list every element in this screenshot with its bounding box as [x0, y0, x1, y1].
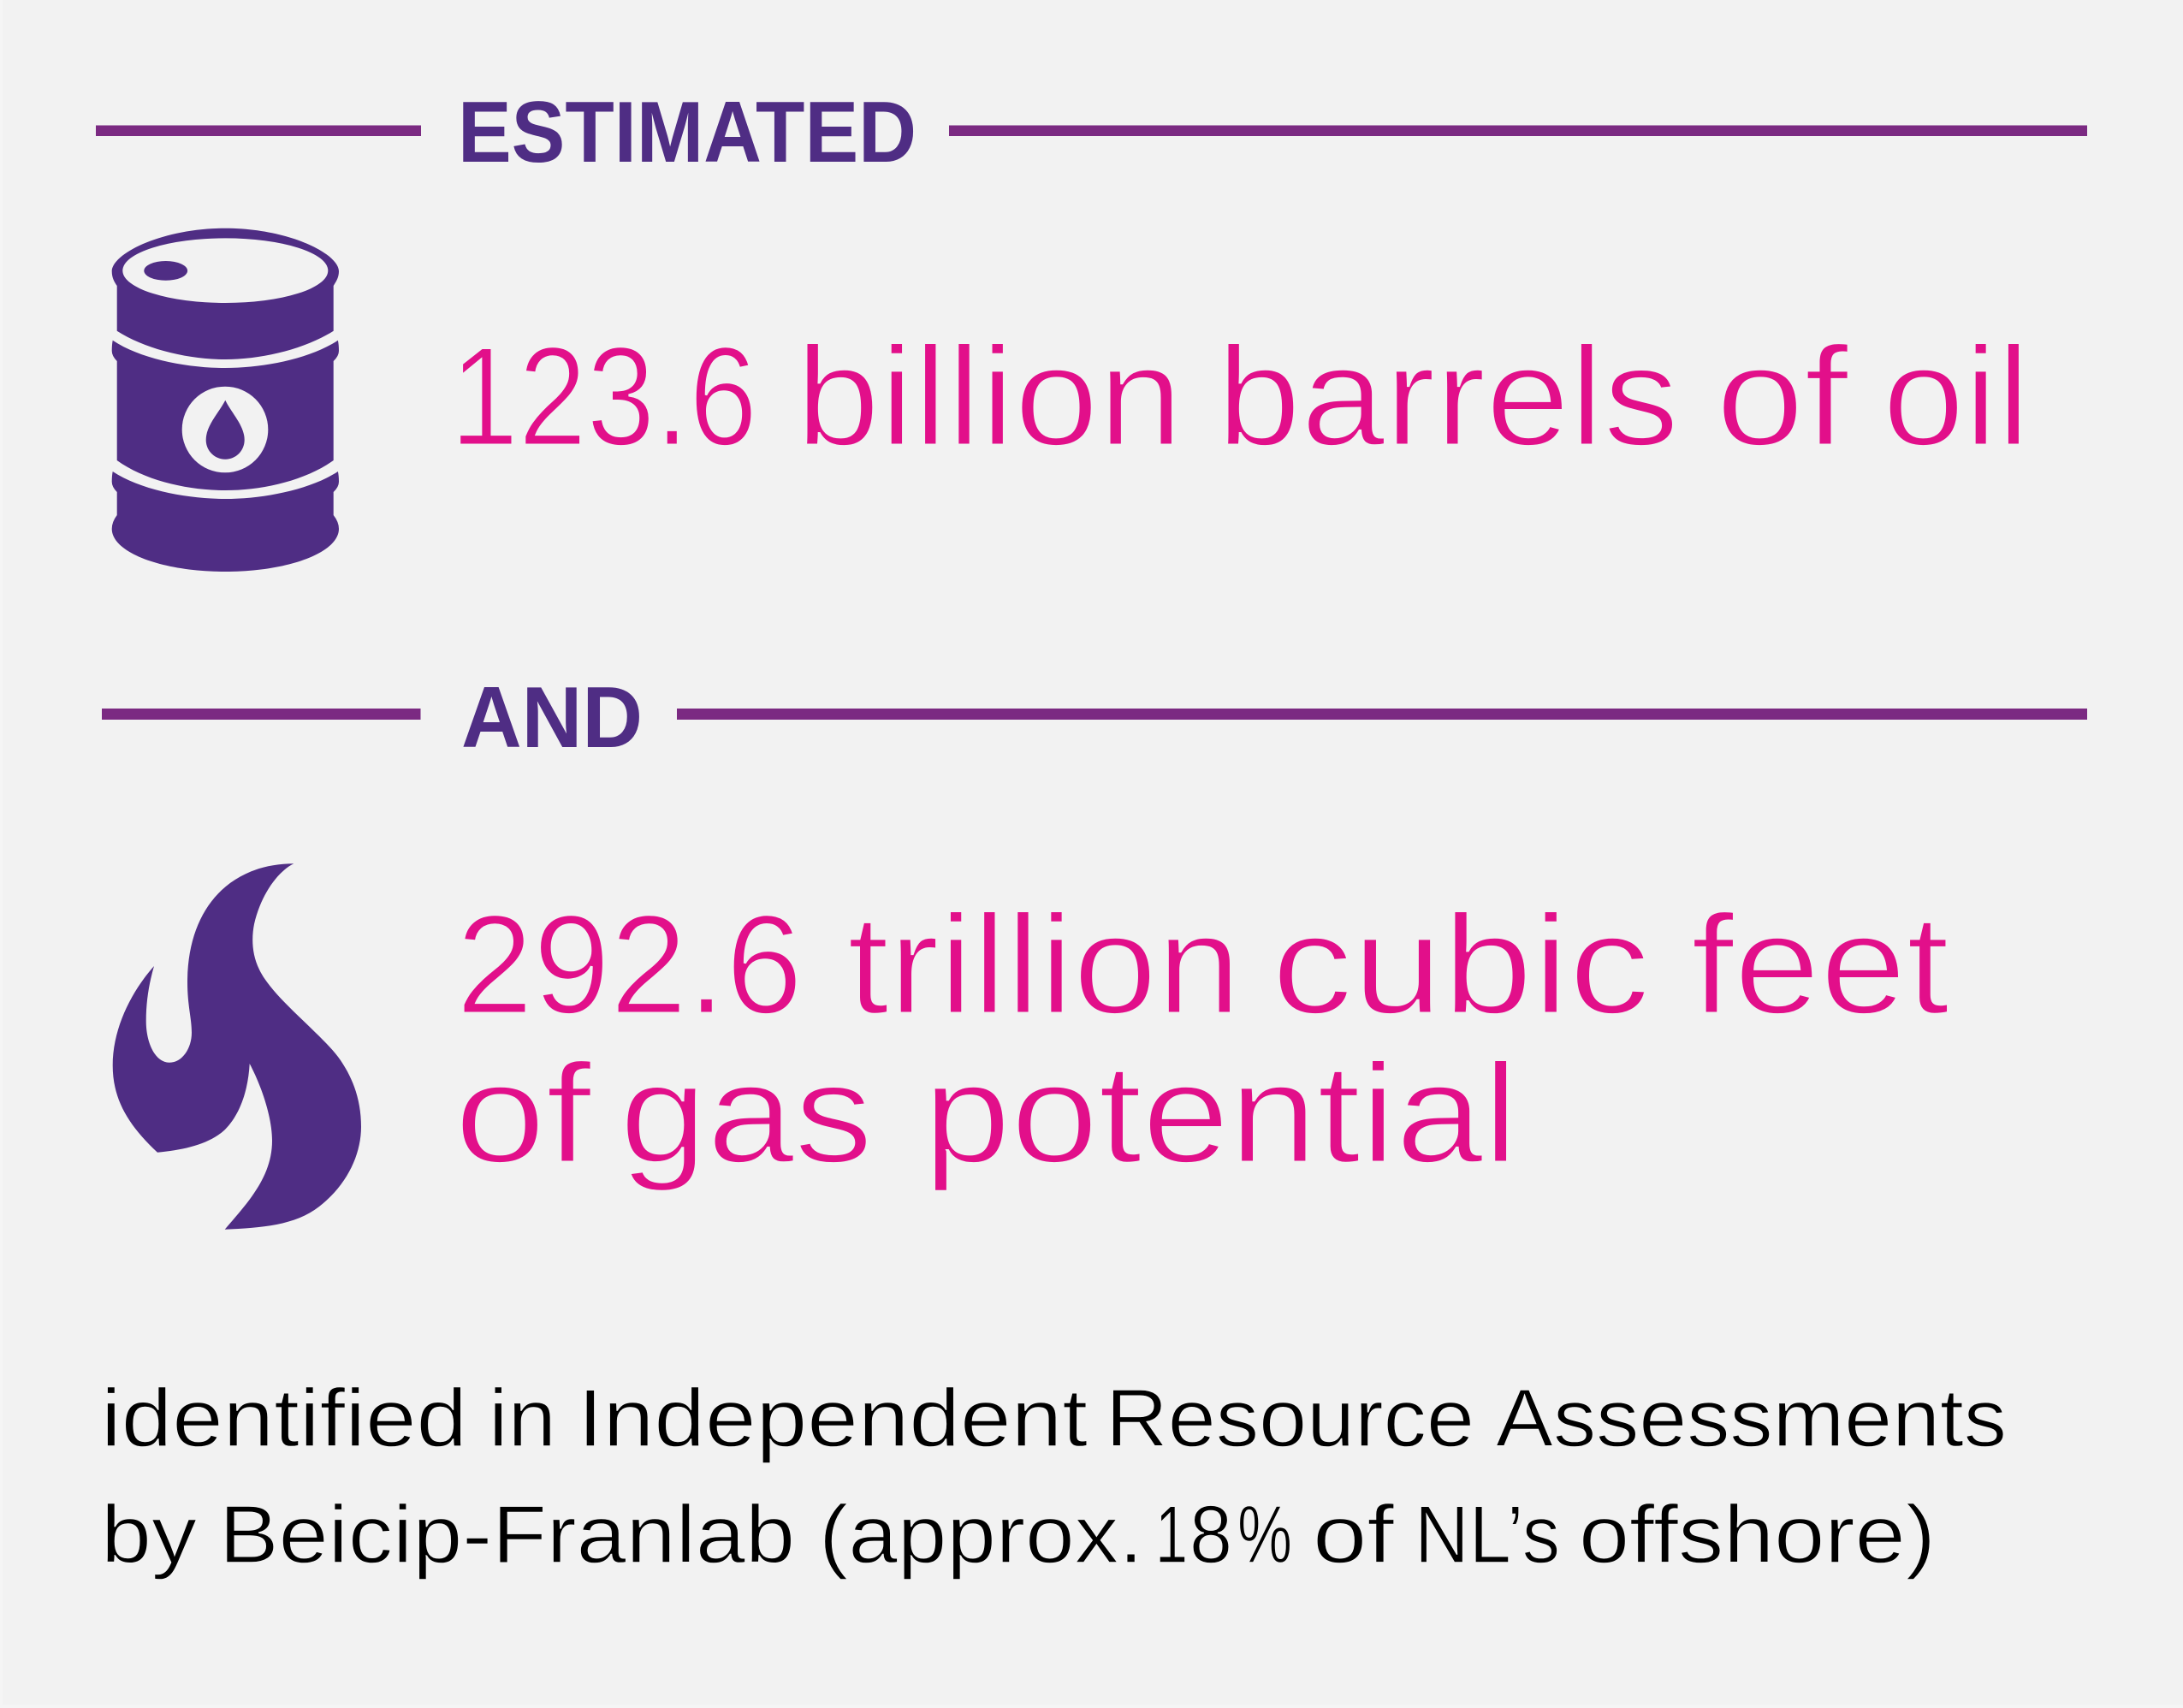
oil figure: oil [1883, 317, 2030, 475]
source note: % [1237, 1489, 1292, 1580]
source note: in [489, 1373, 556, 1464]
source note: by [101, 1489, 197, 1580]
source note: of [1313, 1489, 1394, 1580]
source note: NL’s [1415, 1489, 1560, 1580]
heading: and: AND [461, 670, 643, 766]
source note: Independent [578, 1373, 1088, 1464]
gas figure: of [454, 1035, 592, 1192]
oil figure: of [1716, 317, 1849, 475]
source note: 8 [1189, 1489, 1232, 1580]
oil figure: barrels [1217, 317, 1679, 475]
heading: estimated: ESTIMATED [458, 85, 917, 181]
gas figure: cubic [1272, 886, 1650, 1043]
source note: Resource [1106, 1373, 1474, 1464]
icon: gas flame [113, 863, 361, 1230]
source note: 1 [1155, 1489, 1188, 1580]
gas figure: 292.6 [456, 886, 803, 1043]
gas figure: feet [1691, 886, 1949, 1043]
oil figure: 123.6 [450, 317, 757, 475]
heading: and [102, 670, 2087, 766]
heading: estimated [96, 85, 2087, 181]
gas figure: trillion [847, 886, 1241, 1043]
source note: offshore) [1579, 1489, 1936, 1580]
source note: Beicip-Franlab [219, 1489, 795, 1580]
icon: oil barrel [112, 228, 339, 572]
source note [101, 1373, 2007, 1580]
gas figure [454, 886, 1949, 1192]
gas figure: potential [923, 1035, 1518, 1192]
gas figure: gas [620, 1035, 873, 1192]
source note: Assessments [1496, 1373, 2007, 1464]
source note: (approx. [819, 1489, 1143, 1580]
source note: identified [101, 1373, 467, 1464]
oil figure: billion [796, 317, 1183, 475]
